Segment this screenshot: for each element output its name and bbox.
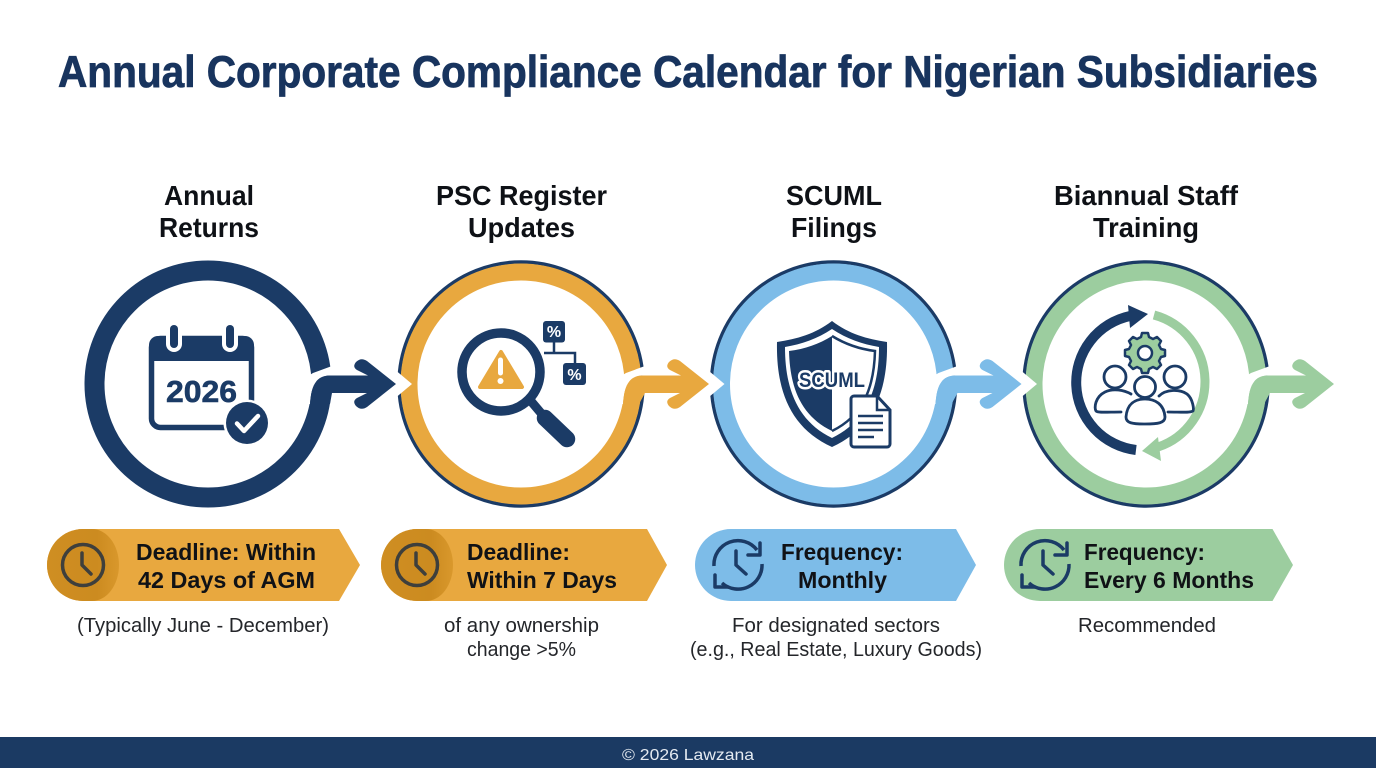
heading: SCUML filings: Filings [791,212,877,243]
icon: calendar 2026 with check: 2026 [166,374,237,409]
heading: SCUML filings: SCUML [786,180,882,211]
frequency badge: biannual staff training: Frequency: [1084,539,1205,565]
heading: annual returns [159,180,259,243]
icon: calendar 2026 with check [149,322,270,446]
heading: biannual staff training: Biannual Staff [1054,180,1239,211]
icon: SCUML shield with document: SCUML [799,369,865,392]
heading: annual returns: Returns [159,212,259,243]
heading: biannual staff training: Training [1093,212,1199,243]
deadline badge: PSC register updates: Within 7 Days [467,567,617,593]
heading: SCUML filings [786,180,882,243]
note: PSC register updates: of any ownership [444,614,599,637]
deadline badge: PSC register updates [381,529,667,601]
note: SCUML filings: (e.g., Real Estate, Luxury Goods) [690,638,982,661]
heading: PSC register updates [436,180,607,243]
note: annual returns: (Typically June - December) [77,614,329,637]
panel: SCUML filings [690,180,1022,661]
ring with arrow: SCUML filings [709,262,1022,506]
frequency badge: biannual staff training: Every 6 Months [1084,567,1254,593]
ring with arrow: annual returns [94,270,396,498]
heading: PSC register updates: PSC Register [436,180,607,211]
icon: magnifier with warning and ownership chart: % [567,367,582,384]
footer: © 2026 Lawzana [622,747,754,764]
ring with arrow: PSC register updates [396,262,709,506]
frequency badge: SCUML filings: Monthly [798,567,887,593]
panel: PSC register updates [381,180,709,661]
deadline badge: annual returns: Deadline: Within [136,539,316,565]
footer [0,737,1376,768]
frequency badge: biannual staff training [1004,529,1293,601]
deadline badge: PSC register updates: Deadline: [467,539,570,565]
deadline badge: annual returns: 42 Days of AGM [138,567,315,593]
note: SCUML filings [690,614,982,661]
icon: SCUML shield with document [777,321,890,447]
note: PSC register updates: change >5% [467,638,576,661]
heading: annual returns: Annual [164,180,254,211]
icon: training cycle with people and gear [1076,305,1205,461]
heading: biannual staff training [1054,180,1239,243]
note: SCUML filings: For designated sectors [732,614,940,637]
frequency badge: SCUML filings [695,529,976,601]
deadline badge: annual returns [47,529,360,601]
note: biannual staff training: Recommended [1078,614,1216,637]
panel: biannual staff training [1004,180,1334,637]
heading: PSC register updates: Updates [468,212,575,243]
frequency badge: SCUML filings: Frequency: [781,539,903,565]
note: PSC register updates [444,614,599,661]
icon: magnifier with warning and ownership chart [462,321,586,439]
panel: annual returns [47,180,396,637]
icon: magnifier with warning and ownership chart: % [547,324,561,341]
ring with arrow: biannual staff training [1022,262,1334,506]
